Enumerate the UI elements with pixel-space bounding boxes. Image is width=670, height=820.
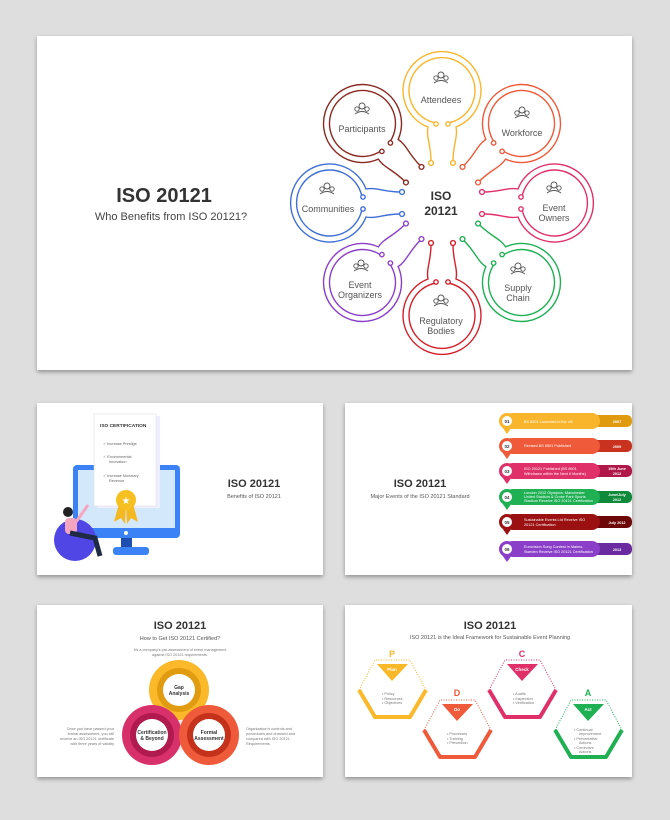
panel: certification process: compared with ISO 20121 [246,737,290,741]
panel: PDCA [345,605,632,777]
timeline rows: June/July [608,493,627,497]
timeline rows: 2013 [613,548,621,552]
three circles diagram: & Beyond [140,736,164,742]
three circles diagram: Assessment [194,736,224,742]
panel: benefits slide [37,403,323,575]
PDCA hexagons: • Prevention [447,741,468,745]
panel: major events timeline: Major Events of the ISO 20121 Standard [370,494,470,500]
flower diagram: Regulatory [419,316,463,326]
monitor illustration: Revenue [109,479,124,483]
timeline rows: 04 [504,495,510,500]
panel: major events timeline: ISO 20121 [394,478,446,490]
panel: certification process: It's a company's pre-assessment of event management [134,648,227,652]
PDCA hexagons: • Policy [382,692,395,696]
timeline rows: 2007 [613,420,621,424]
PDCA hexagons: • Verification [513,701,534,705]
panel: certification process: formal assessment, you will [68,732,114,736]
panel: certification process: against ISO 20121 requirements. [152,653,208,657]
PDCA hexagons: Act [584,707,592,712]
timeline rows: 2012 [613,498,621,502]
flower diagram: Chain [506,293,530,303]
PDCA hexagons: P [389,649,395,659]
timeline rows: Sustainable Events Ltd Receive ISO [524,518,585,522]
PDCA hexagons: • Objectives [382,701,402,705]
timeline rows: 03 [504,469,510,474]
PDCA hexagons: A [585,688,592,698]
PDCA hexagons: • Training [447,737,463,741]
title: ISO 20121 [116,185,212,207]
timeline rows: 20121 Certification [524,523,556,527]
timeline rows: 2012 [613,472,621,476]
PDCA hexagons: • Audits [513,692,526,696]
panel: certification process: Requirements. [246,742,271,746]
subtitle: Who Benefits from ISO 20121? [95,211,247,223]
monitor illustration: ISO CERTIFICATION [100,423,147,429]
PDCA hexagons: • Continual [574,728,593,732]
panel: main slide who benefits [37,36,632,370]
PDCA hexagons: Do [454,707,460,712]
flower diagram: Workforce [502,128,542,138]
monitor illustration: ✓ Increase Prestige [103,442,137,446]
timeline rows: ISO 20121 Published (BS 8901 [524,467,577,471]
timeline rows: Stadium Receive ISO 20121 Certification [524,499,593,503]
flower diagram: 20121 [424,204,458,218]
PDCA hexagons: C [519,649,526,659]
flower diagram: Organizers [338,290,383,300]
timeline rows: Revised BS 8901 Published [524,444,571,448]
panel: PDCA: ISO 20121 is the Ideal Framework for Sustainable Event Planning [410,635,570,641]
PDCA hexagons: Improvement [579,732,602,736]
three circles diagram: Formal [201,730,218,736]
PDCA hexagons: D [454,688,461,698]
timeline rows: BS 8901 Launched in the UK [524,420,573,424]
flower diagram: Bodies [427,326,455,336]
panel: PDCA: ISO 20121 [464,620,516,632]
flower diagram: Participants [338,124,386,134]
panel: certification process: ISO 20121 [154,620,206,632]
timeline rows: Eurovision Song Contest in Malmo, [524,545,583,549]
timeline rows: United Stadium & Croke Park Sports [524,495,586,499]
timeline rows: July 2012 [608,521,626,525]
timeline rows: 06 [504,547,510,552]
flower diagram: Communities [302,204,355,214]
panel: benefits slide: Benefits of ISO 20121 [227,494,281,500]
panel: certification process: procedures and checked and [246,732,295,736]
title: ISO 20121 [228,478,280,490]
three circles diagram: Certification [137,730,167,736]
three circles diagram: Gap [174,685,184,691]
timeline rows: 01 [504,419,510,424]
panel: certification process: with three years of validity [70,742,114,746]
PDCA hexagons: Plan [387,667,397,672]
PDCA hexagons: • Corrective [574,746,594,750]
flower diagram: Attendees [421,95,462,105]
timeline rows: Withdrawn within the Next 6 Months) [524,472,587,476]
PDCA hexagons: • Preventative [574,737,598,741]
timeline rows [499,413,632,562]
PDCA hexagons: Actions [579,741,592,745]
panel: certification process [37,605,323,777]
timeline rows: London 2012 Olympics, Manchester [524,491,586,495]
panel: certification process: Once you have passed your [67,727,115,731]
panel: certification process: How to Get ISO 20121 Certified? [140,636,220,642]
panel: certification process: receive an ISO 20121 certificate [60,737,114,741]
timeline rows: 15th June [608,467,626,471]
flower diagram: Supply [504,283,532,293]
monitor illustration: Innovation [109,460,127,464]
flower diagram: Event [348,280,372,290]
three circles diagram [122,660,239,765]
flower diagram [291,52,593,354]
PDCA hexagons: Check [515,667,529,672]
PDCA hexagons [359,649,622,757]
timeline rows: 2009 [613,445,621,449]
PDCA hexagons: • Resources [382,697,403,701]
timeline rows: 05 [504,520,510,525]
PDCA hexagons: Actions [579,750,592,754]
panel: certification process: Organization's controls and [246,727,292,731]
center label: ISO [431,189,451,203]
PDCA hexagons: • Inspection [513,697,533,701]
three circles diagram: Analysis [169,691,189,697]
monitor illustration: ✓ Increase Monetary [103,474,139,478]
flower diagram: Owners [538,213,570,223]
timeline rows: Sweden Receive ISO 20121 Certification [524,550,593,554]
PDCA hexagons: • Processes [447,732,467,736]
monitor illustration: ✓ Environmental [103,455,132,459]
panel: major events timeline [345,403,632,575]
monitor illustration: ★ [122,496,131,507]
timeline rows: 02 [504,444,510,449]
monitor illustration [54,414,180,561]
flower diagram: Event [542,203,566,213]
